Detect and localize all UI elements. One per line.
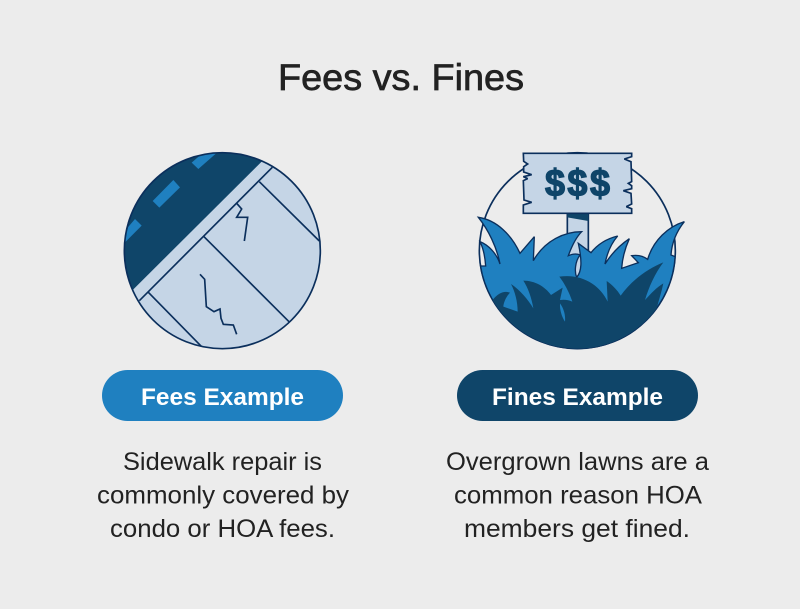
text: fines description: members get fined. (464, 515, 690, 543)
grass: leaf highlight (560, 303, 565, 322)
text: fees description: Sidewalk repair is (123, 448, 322, 476)
grass: light layer (478, 217, 684, 349)
text: fines description (446, 448, 709, 543)
button: fees example (102, 370, 343, 421)
text: fines description: common reason HOA (454, 482, 702, 510)
button: fines example (457, 370, 698, 421)
sign board (523, 153, 632, 213)
sign post (567, 213, 588, 280)
text: fees description: condo or HOA fees. (110, 515, 335, 543)
crack: upper (237, 203, 248, 241)
crack: lower (200, 274, 237, 334)
sign text: $ (590, 162, 610, 205)
icon: overgrown lawn with money sign (478, 153, 684, 349)
text: fees description: commonly covered by (97, 482, 350, 510)
title: Fees vs. Fines (278, 57, 524, 98)
text: fees description (97, 448, 350, 543)
button: fines example: Fines Example (492, 384, 663, 411)
text: fines description: Overgrown lawns are a (446, 448, 709, 476)
sign text: $ (545, 162, 565, 205)
sign text: $ (567, 162, 587, 205)
button: fees example: Fees Example (141, 384, 304, 411)
sign text (545, 162, 610, 205)
icon: cracked sidewalk (124, 152, 322, 350)
grass: dark layer (493, 262, 663, 349)
